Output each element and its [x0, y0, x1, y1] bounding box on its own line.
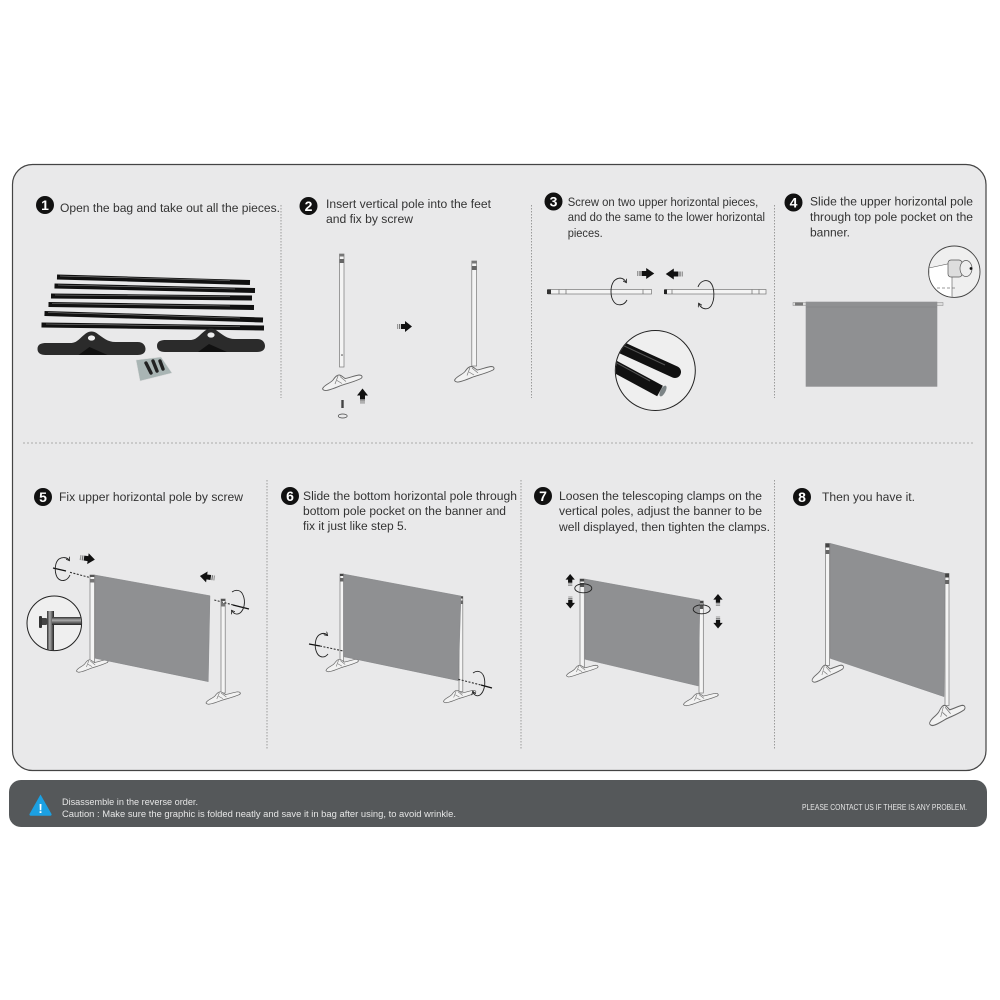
number badge 1: 1: [41, 197, 49, 213]
main instructions panel: [12, 164, 986, 770]
step 1: [36, 196, 280, 381]
clamp rotation rings: [575, 584, 710, 614]
black feet: [38, 328, 265, 355]
step 2 text: [326, 197, 492, 226]
separate pole and foot: [323, 254, 362, 391]
caution text: Caution : Make sure the graphic is folded neatly and save it in bag after using, to avoid wrinkle.: [62, 809, 456, 820]
caution text: [62, 797, 456, 820]
screws and rotation arrows: [53, 558, 249, 614]
step 6 text: Slide the bottom horizontal pole through: [303, 489, 517, 503]
number badge 1: [36, 196, 54, 214]
banner stand: [326, 574, 476, 703]
step 3 text: pieces.: [568, 226, 603, 240]
number badge 5: [34, 488, 52, 506]
zoom circle: pole in pocket: [929, 246, 980, 298]
contact note: PLEASE CONTACT US IF THERE IS ANY PROBLEM.: [802, 803, 967, 812]
arrow: right: [397, 321, 412, 332]
number badge 4: 4: [790, 194, 798, 210]
arrow: up: [357, 388, 368, 404]
step 2 text: and fix by screw: [326, 212, 413, 226]
icon: warning triangle: !: [38, 801, 43, 816]
banner stand: [566, 579, 718, 706]
banner with top pole: [793, 302, 943, 387]
step 5: [27, 488, 249, 704]
step 3 text: and do the same to the lower horizontal: [568, 210, 765, 224]
number badge 3: [544, 192, 562, 210]
step 1 text: Open the bag and take out all the pieces.: [60, 201, 280, 215]
step 8 text: Then you have it.: [822, 490, 915, 504]
number badge 7: 7: [539, 488, 547, 504]
arrows: inward: [79, 552, 216, 584]
caution text: Disassemble in the reverse order.: [62, 797, 198, 808]
number badge 3: 3: [550, 194, 558, 210]
step 3: [544, 192, 766, 410]
zoom circle: pole joint: [612, 330, 695, 410]
step 3 text: Screw on two upper horizontal pieces,: [568, 195, 758, 209]
step 2 text: Insert vertical pole into the feet: [326, 197, 492, 211]
step 7 text: well displayed, then tighten the clamps.: [558, 520, 770, 534]
step 7 text: [558, 489, 770, 534]
step 4 text: through top pole pocket on the: [810, 210, 973, 224]
step 7 text: Loosen the telescoping clamps on the: [559, 489, 762, 503]
step 7: [534, 487, 770, 706]
step 7 text: vertical poles, adjust the banner to be: [559, 504, 762, 518]
step 4 text: Slide the upper horizontal pole: [810, 194, 973, 208]
screws and rotation arrows: [309, 634, 492, 696]
number badge 7: [534, 487, 552, 505]
icon: warning triangle: [29, 794, 52, 816]
step 8: [793, 488, 965, 726]
step 6 text: bottom pole pocket on the banner and: [303, 504, 506, 518]
step 6 text: [303, 489, 517, 533]
up and down arrows: [566, 574, 723, 628]
black poles: [42, 276, 264, 328]
step 5 text: Fix upper horizontal pole by screw: [59, 490, 243, 504]
number badge 5: 5: [39, 489, 47, 505]
finished banner stand: [812, 543, 965, 726]
number badge 8: [793, 488, 811, 506]
number badge 4: [784, 194, 802, 212]
step 6: [281, 487, 517, 703]
assembled pole and foot: [455, 261, 494, 382]
step 4: [784, 194, 980, 387]
rotation arrows: [611, 278, 714, 309]
arrows: toward each other: [637, 268, 683, 280]
step 2: [300, 197, 494, 418]
number badge 2: [300, 197, 318, 215]
number badge 8: 8: [798, 489, 806, 505]
step 4 text: banner.: [810, 226, 850, 240]
step 3 text: [568, 195, 765, 240]
banner stand: [76, 575, 240, 704]
number badge 6: 6: [286, 488, 294, 504]
footer bar: [9, 780, 987, 827]
bag of screws: [136, 357, 172, 381]
infographic: [9, 164, 987, 827]
step 4 text: [810, 194, 973, 240]
zoom circle: screw joint: [27, 596, 82, 656]
horizontal pole pieces: [547, 290, 766, 294]
number badge 2: 2: [305, 198, 313, 214]
number badge 6: [281, 487, 299, 505]
screw and washer: [338, 400, 347, 418]
step 6 text: fix it just like step 5.: [303, 519, 407, 533]
